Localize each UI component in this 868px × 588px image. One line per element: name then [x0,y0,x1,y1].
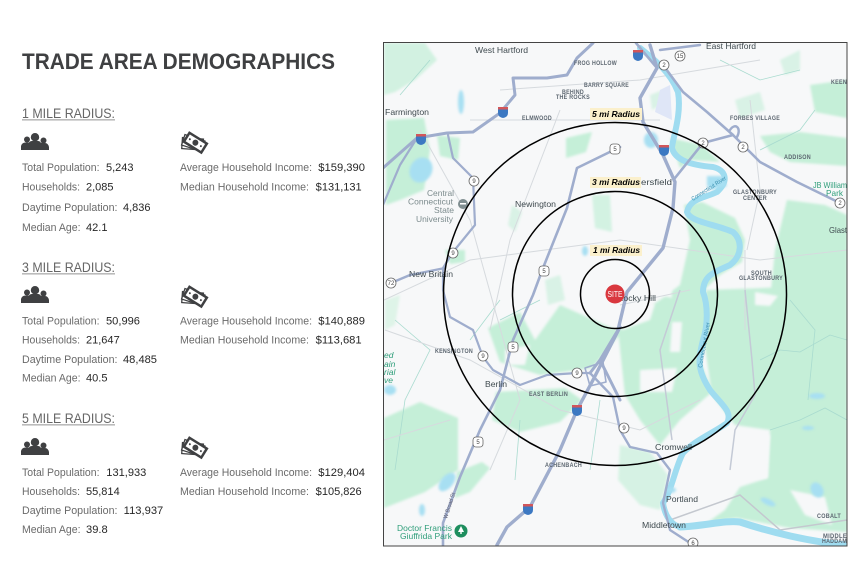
population stats: 131,933 [106,467,146,479]
map: place labels: ain [384,359,396,369]
icon: people [21,133,49,150]
map: place labels: Berlin [485,379,507,389]
population stats [22,467,163,536]
map: place labels: rial [384,367,396,377]
map: rivers and ponds [640,48,847,545]
map: place labels: ELMWOOD [522,116,552,122]
map: route numbers: 2 [838,201,842,207]
income stats: Median Household Income: [180,182,309,194]
map: place labels: ve [384,375,393,385]
map: place labels: KEEN [831,80,847,86]
map: place labels: Connecticut River [691,176,728,203]
income stats: Median Household Income: [180,334,309,346]
map: place labels: EAST BERLIN [529,392,568,398]
income stats [180,467,365,498]
population stats: Median Age: [22,372,80,384]
population stats: Households: [22,486,80,498]
population stats: Daytime Population: [22,202,118,214]
population stats: Median Age: [22,524,80,536]
map: route numbers: 5 [511,345,515,351]
income stats: Average Household Income: [180,316,312,328]
population stats: 5,243 [106,162,134,174]
map: place labels: W Broad St [443,492,457,520]
income stats: $131,131 [316,182,362,194]
icon: park marker [454,524,468,538]
map: place labels: GLASTONBURY [739,276,783,282]
map: place labels: GLASTONBURY [733,190,777,196]
map: place labels: COBALT [817,514,841,520]
income stats [180,162,365,194]
map: route numbers: 9 [472,179,476,185]
population stats: Total Population: [22,467,100,479]
map: route numbers: 9 [451,251,455,257]
population stats: Households: [22,182,80,194]
map: route numbers: 9 [481,354,485,360]
map: place labels: ed [384,350,394,360]
income stats: Median Household Income: [180,486,309,498]
map: route shields [386,51,845,548]
heading: 1 mile radius: 1 MILE RADIUS: [22,105,115,121]
map: place labels: Central [427,188,454,198]
map: route numbers: 9 [575,371,579,377]
population stats: 4,836 [123,202,150,214]
map: route numbers: 2 [701,141,705,147]
icon: university marker [458,199,468,209]
radius circles [444,122,786,466]
map: place labels: MIDDLE [823,534,847,540]
title: TRADE AREA DEMOGRAPHICS [22,49,335,74]
map: place labels: SOUTH [751,271,772,277]
map: route numbers: 9 [622,426,626,432]
map: place labels: Portland [666,494,698,504]
map: route numbers: 5 [476,440,480,446]
map: place labels: ersfield [641,177,672,187]
population stats: 2,085 [86,182,114,194]
map: place labels: BARRY SQUARE [584,83,629,89]
label: 3 mi radius: 3 mi Radius [592,178,641,187]
population stats: Median Age: [22,222,80,234]
map: route numbers: 6 [691,541,695,547]
icon: people [21,438,49,455]
map: place labels: CENTER [743,196,767,202]
map: place labels: State [434,205,454,215]
population stats: Total Population: [22,316,100,328]
map: route numbers: 72 [388,281,395,287]
income stats: $105,826 [316,486,362,498]
icon: money [177,129,209,159]
map: highways [383,43,840,545]
population stats: Daytime Population: [22,354,118,366]
map: place labels: Cromwell [655,442,692,452]
map: place labels [384,41,848,545]
map: place labels: Park [826,188,844,198]
population stats: 42.1 [86,222,108,234]
map: place labels: West Hartford [475,45,528,55]
panel: 5 mile radius [21,410,365,536]
map border [384,42,847,546]
population stats [22,162,150,234]
map: route numbers: 2 [741,145,745,151]
population stats: 39.8 [86,524,108,536]
population stats: 113,937 [124,505,163,517]
population stats: 48,485 [123,354,157,366]
income stats: $140,889 [318,316,365,328]
map: interstate shields [416,50,669,515]
map: place labels: New Britain [409,269,453,279]
income stats: Average Household Income: [180,162,312,174]
label: 5 mi radius [590,108,642,120]
map: place labels: University [416,214,454,224]
map: place labels: Middletown [642,520,686,530]
map: place labels: Doctor Francis [397,523,452,533]
map: local roads [384,60,847,530]
population stats: Total Population: [22,162,100,174]
population stats: 55,814 [86,486,120,498]
map: place labels: Connecticut [408,196,454,206]
icon: money [177,283,209,313]
map: place labels: JB William [813,180,847,190]
label: 5 mi radius: 5 mi Radius [592,110,641,119]
map: place labels: HADDAM [822,539,847,545]
map: place labels: Rocky Hill [617,293,656,303]
population stats: 40.5 [86,372,108,384]
map: place labels: BEHIND [562,90,584,96]
map: route numbers: 15 [677,54,684,60]
map: route numbers: 5 [542,269,546,275]
map: green areas [384,43,847,532]
income stats [180,316,365,346]
map: place labels: Giuffrida Park [400,531,453,541]
population stats [22,316,157,384]
map: place labels: ACHENBACH [545,463,582,469]
map: place labels: Glast [829,225,848,235]
icon: people [21,286,49,303]
population stats: 21,647 [86,334,120,346]
map: place labels: Connecticut River [698,322,712,368]
map: route numbers: 2 [662,63,666,69]
population stats: Daytime Population: [22,505,118,517]
income stats: $159,390 [318,162,365,174]
map: airport tint [655,85,672,120]
income stats: $113,681 [316,334,362,346]
heading: 3 mile radius: 3 MILE RADIUS: [22,259,115,275]
map: place labels: FORBES VILLAGE [730,116,780,122]
income stats: Average Household Income: [180,467,312,479]
map: route numbers [388,54,842,547]
income stats: $129,404 [318,467,365,479]
map: place labels: East Hartford [706,41,756,51]
map: place labels: Farmington [385,107,429,117]
map: route numbers: 5 [613,147,617,153]
heading: 5 mile radius: 5 MILE RADIUS: [22,410,115,426]
map: place labels: KENSINGTON [435,349,473,355]
panel: 1 mile radius [21,105,365,234]
label: 1 mi radius: 1 mi Radius [593,246,641,255]
icon: money [177,434,209,464]
map: streams [395,60,847,480]
map panel [383,41,848,548]
map: place labels: Newington [515,199,556,209]
map: place labels: THE ROCKS [556,95,590,101]
site marker [606,284,624,304]
site marker: SITE [608,290,622,299]
map: place labels: ADDISON [784,155,811,161]
panel: 3 mile radius [21,259,365,384]
population stats: Households: [22,334,80,346]
population stats: 50,996 [106,316,140,328]
map: place labels: FROG HOLLOW [574,61,617,67]
